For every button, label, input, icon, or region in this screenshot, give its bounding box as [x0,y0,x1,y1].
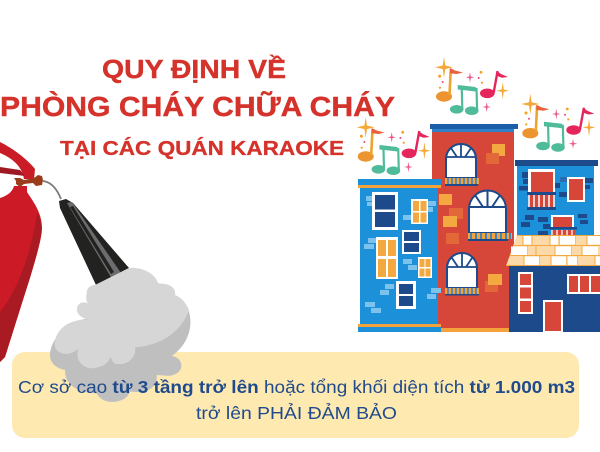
music notes left [357,117,431,175]
extinguisher smoke cloud [50,268,190,402]
title: PHÒNG CHÁY CHỮA CHÁY [0,91,395,122]
callout text: Cơ sở cao từ 3 tầng trở lên hoặc tổng khối diện tích từ 1.000 m3 [18,377,575,397]
title: TẠI CÁC QUÁN KARAOKE [60,137,344,160]
music notes right [521,94,595,152]
hose [43,181,61,199]
buildings illustration [358,124,600,332]
title: QUY ĐỊNH VỀ [102,54,286,84]
cylinder [0,186,42,362]
handle lever upper [0,142,35,179]
cylinder shading [0,213,41,362]
callout text: trở lên PHẢI ĐẢM BẢO [196,402,397,423]
nozzle [59,199,129,285]
arched window top [445,144,479,186]
handle lever lower [0,167,25,176]
fire extinguisher [0,142,129,362]
red building [430,124,518,332]
arched window middle [468,190,512,241]
blue building right [515,160,598,241]
callout box [12,352,579,438]
music notes top [435,57,509,115]
title [0,54,395,160]
arched window lower [445,253,479,296]
navy house with tiled roof [506,235,600,332]
callout text [18,377,575,423]
collar [14,175,43,187]
blue building left [358,179,441,332]
